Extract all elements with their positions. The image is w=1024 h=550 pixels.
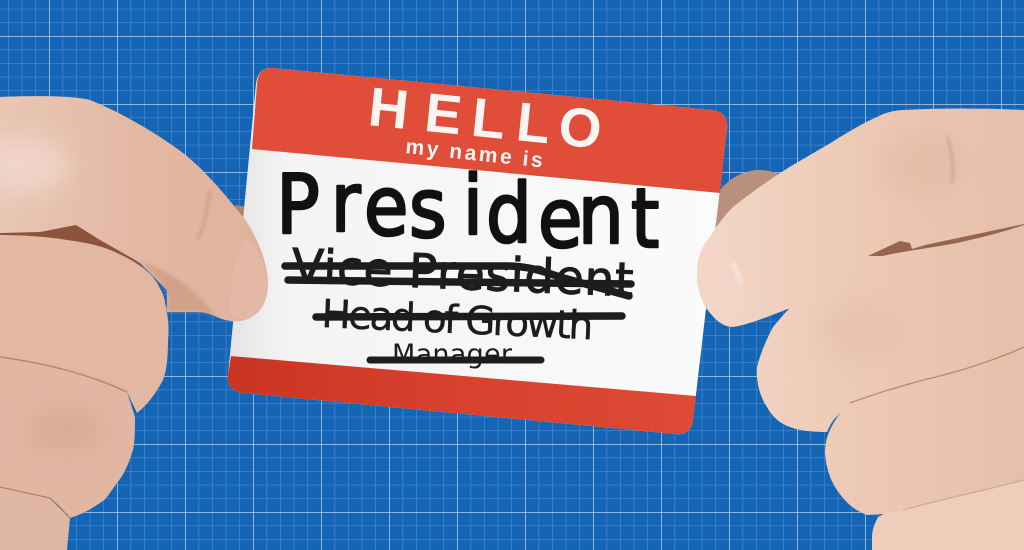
ring finger bbox=[0, 357, 135, 518]
crossed-out title: Manager: Manager bbox=[392, 339, 513, 370]
thumbnail bbox=[230, 238, 268, 320]
crease shadow under index finger bbox=[868, 224, 1024, 256]
handwritten title: President: President bbox=[276, 156, 659, 267]
my name is subheading: my name is bbox=[404, 135, 547, 173]
strike lines bbox=[285, 266, 631, 296]
right hand bbox=[697, 108, 1024, 550]
tag white body bbox=[228, 68, 727, 434]
little finger bbox=[872, 470, 1024, 550]
HELLO heading: HELLO bbox=[366, 75, 605, 161]
little finger bbox=[0, 487, 70, 550]
crossed-out title: Head of Growth: Head of Growth bbox=[321, 292, 594, 349]
middle finger bbox=[757, 225, 1024, 432]
middle finger bbox=[0, 235, 169, 413]
left hand bbox=[0, 96, 268, 550]
tag bottom red band bbox=[228, 356, 696, 434]
tag top red band bbox=[252, 68, 727, 193]
index finger and thumb bbox=[0, 96, 268, 321]
crease shadow between fingers bbox=[0, 225, 160, 285]
finger behind name tag, left hand bbox=[232, 205, 247, 222]
strike line bbox=[316, 316, 622, 317]
underside shading of index finger bbox=[140, 262, 217, 317]
finger behind name tag, right hand bbox=[716, 170, 782, 232]
crossed-out title: Vice President: Vice President bbox=[290, 239, 635, 308]
thumbnail bbox=[698, 257, 744, 318]
skin highlights and creases bbox=[0, 130, 1024, 518]
strike line bbox=[370, 356, 541, 364]
index finger and thumb bbox=[697, 108, 1024, 327]
ring finger bbox=[825, 347, 1024, 515]
name tag bbox=[228, 68, 727, 434]
